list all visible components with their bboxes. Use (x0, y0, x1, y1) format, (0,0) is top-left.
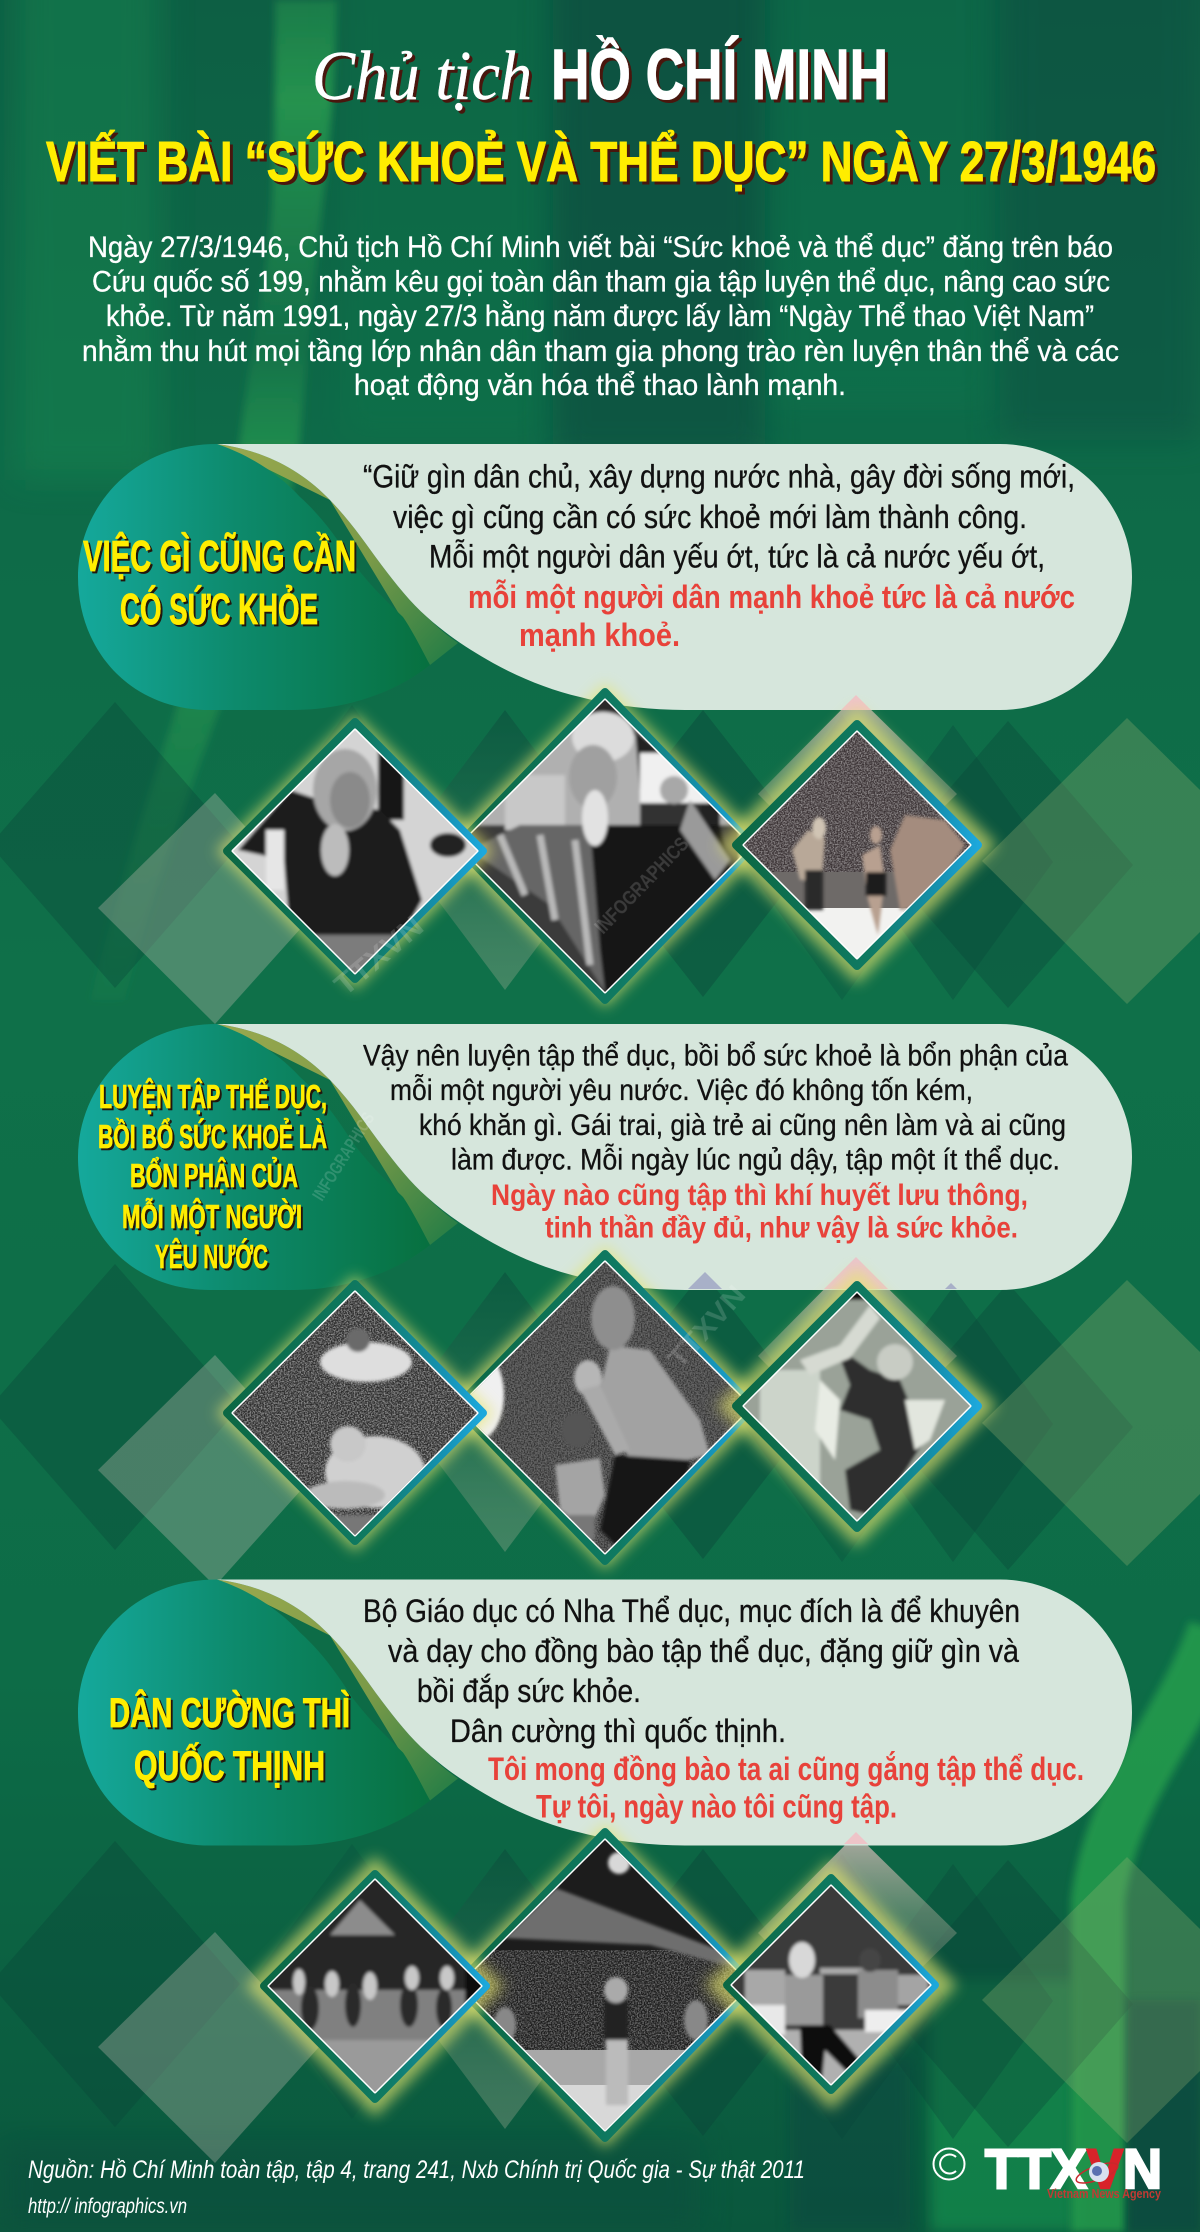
title line 1 name: HỒ CHÍ MINH (551, 36, 888, 115)
watermarks: INFOGRAPHICS (591, 833, 693, 938)
photo row 2 (216, 1245, 997, 1570)
panel 2 heading: YÊU NƯỚC (155, 1238, 268, 1275)
panel 1 shape (78, 444, 1132, 710)
panel 1 heading: VIỆC GÌ CŨNG CẦN (83, 531, 356, 581)
watermarks (308, 833, 751, 1374)
photo diamond: group exercise in a clearing (245, 1856, 504, 2117)
photo diamond: three bathers (717, 706, 997, 984)
panel 3 quote: và dạy cho đồng bào tập thể dục, đặng giữ gìn và (388, 1633, 1019, 1669)
photo diamond: swimming (216, 1275, 494, 1552)
panel 1 heading (83, 531, 356, 634)
panel 2 heading: LUYỆN TẬP THỂ DỤC, (99, 1078, 327, 1115)
panel 1 quote: Mỗi một người dân yếu ớt, tức là cả nước yếu ớt, (429, 538, 1045, 574)
panel 2 heading (98, 1078, 327, 1275)
panel 2 quote: Vậy nên luyện tập thể dục, bồi bổ sức khoẻ là bổn phận của (363, 1040, 1068, 1072)
panel 2 shape (78, 1024, 1132, 1290)
pattern tips over panels (688, 695, 957, 1844)
logo: TTXVN (934, 2137, 1162, 2201)
panel 1 quote: mạnh khoẻ. (519, 617, 680, 653)
panel 1 quote: mỗi một người dân mạnh khoẻ tức là cả nước (468, 579, 1075, 615)
intro text block: Ngày 27/3/1946, Chủ tịch Hồ Chí Minh viết bài “Sức khoẻ và thể dục” đăng trên báo (88, 231, 1113, 264)
panel 2 quote: làm được. Mỗi ngày lúc ngủ dậy, tập một ít thể dục. (451, 1144, 1060, 1176)
globe (1074, 2159, 1120, 2187)
intro text block: nhằm thu hút mọi tầng lớp nhân dân tham gia phong trào rèn luyện thân thể và các (82, 335, 1119, 368)
wordmark: TTXVN (985, 2137, 1162, 2200)
panel 2 quote: tinh thần đầy đủ, như vậy là sức khỏe. (545, 1212, 1018, 1244)
watermarks: INFOGRAPHICS (308, 1109, 378, 1204)
panel 3 quote (363, 1593, 1084, 1824)
title line 1 script: Chủ tịch (312, 38, 532, 115)
title (46, 36, 1156, 194)
panel 2 quote: mỗi một người yêu nước. Việc đó không tốn kém, (390, 1074, 973, 1107)
agency name: Vietnam News Agency (1047, 2186, 1162, 2201)
panel 3 heading (109, 1688, 350, 1789)
photo diamond: tai chi (717, 1267, 997, 1547)
photo row 1 (216, 683, 997, 1008)
photo diamond: playing billiards (216, 713, 494, 990)
panel 2 quote (363, 1040, 1068, 1244)
panel 1 quote (363, 458, 1075, 653)
panel 3 shape (78, 1580, 1132, 1846)
panel 2 quote: khó khăn gì. Gái trai, già trẻ ai cũng nên làm và ai cũng (419, 1109, 1066, 1142)
intro text block: hoạt động văn hóa thể thao lành mạnh. (354, 369, 846, 402)
photo row 3 (245, 1823, 957, 2148)
panel 3 quote: Tự tôi, ngày nào tôi cũng tập. (536, 1788, 897, 1824)
panel 3 quote: Dân cường thì quốc thịnh. (450, 1713, 786, 1749)
panel 3 (78, 1580, 1132, 1846)
photo diamond: women exercising (705, 1860, 957, 2110)
panel 1 quote: “Giữ gìn dân chủ, xây dựng nước nhà, gây đời sống mới, (363, 458, 1075, 494)
panel 1 quote: việc gì cũng cần có sức khoẻ mới làm thành công. (393, 499, 1027, 535)
watermarks: TTXVN (328, 910, 430, 1002)
panel 2 heading: BỒI BỔ SỨC KHOẺ LÀ (98, 1118, 327, 1155)
watermarks: TTXVN (661, 1279, 751, 1374)
panel 2 heading: MỖI MỘT NGƯỜI (122, 1197, 302, 1235)
intro text block: Cứu quốc số 199, nhằm kêu gọi toàn dân tham gia tập luyện thể dục, nâng cao sức (92, 266, 1110, 298)
website: http:// infographics.vn (28, 2195, 187, 2218)
panel 2 quote: Ngày nào cũng tập thì khí huyết lưu thông, (491, 1179, 1028, 1212)
photo diamond: centre, martial exercise (442, 1245, 768, 1570)
panel 1 (78, 444, 1132, 710)
panel 3 quote: Bộ Giáo dục có Nha Thể dục, mục đích là để khuyên (363, 1593, 1020, 1629)
intro text block: khỏe. Từ năm 1991, ngày 27/3 hằng năm được lấy làm “Ngày Thể thao Việt Nam” (106, 300, 1094, 333)
panel 2 (78, 1024, 1132, 1290)
panel 3 heading: QUỐC THỊNH (134, 1741, 325, 1789)
photo diamond: centre, volleyball (442, 1823, 768, 2148)
source credit: Nguồn: Hồ Chí Minh toàn tập, tập 4, trang 241, Nxb Chính trị Quốc gia - Sự thật 2011 (28, 2156, 805, 2184)
photo diamond: centre, lifting weights (442, 683, 768, 1008)
intro text block (82, 231, 1119, 402)
panel 3 quote: Tôi mong đồng bào ta ai cũng gắng tập thể dục. (488, 1751, 1084, 1787)
panel 3 heading: DÂN CƯỜNG THÌ (109, 1688, 350, 1736)
panel 3 quote: bồi đắp sức khỏe. (417, 1673, 641, 1709)
copyright mark (934, 2148, 964, 2180)
panel 2 heading: BỔN PHẬN CỦA (130, 1157, 298, 1194)
panel 1 heading: CÓ SỨC KHỎE (120, 583, 318, 634)
